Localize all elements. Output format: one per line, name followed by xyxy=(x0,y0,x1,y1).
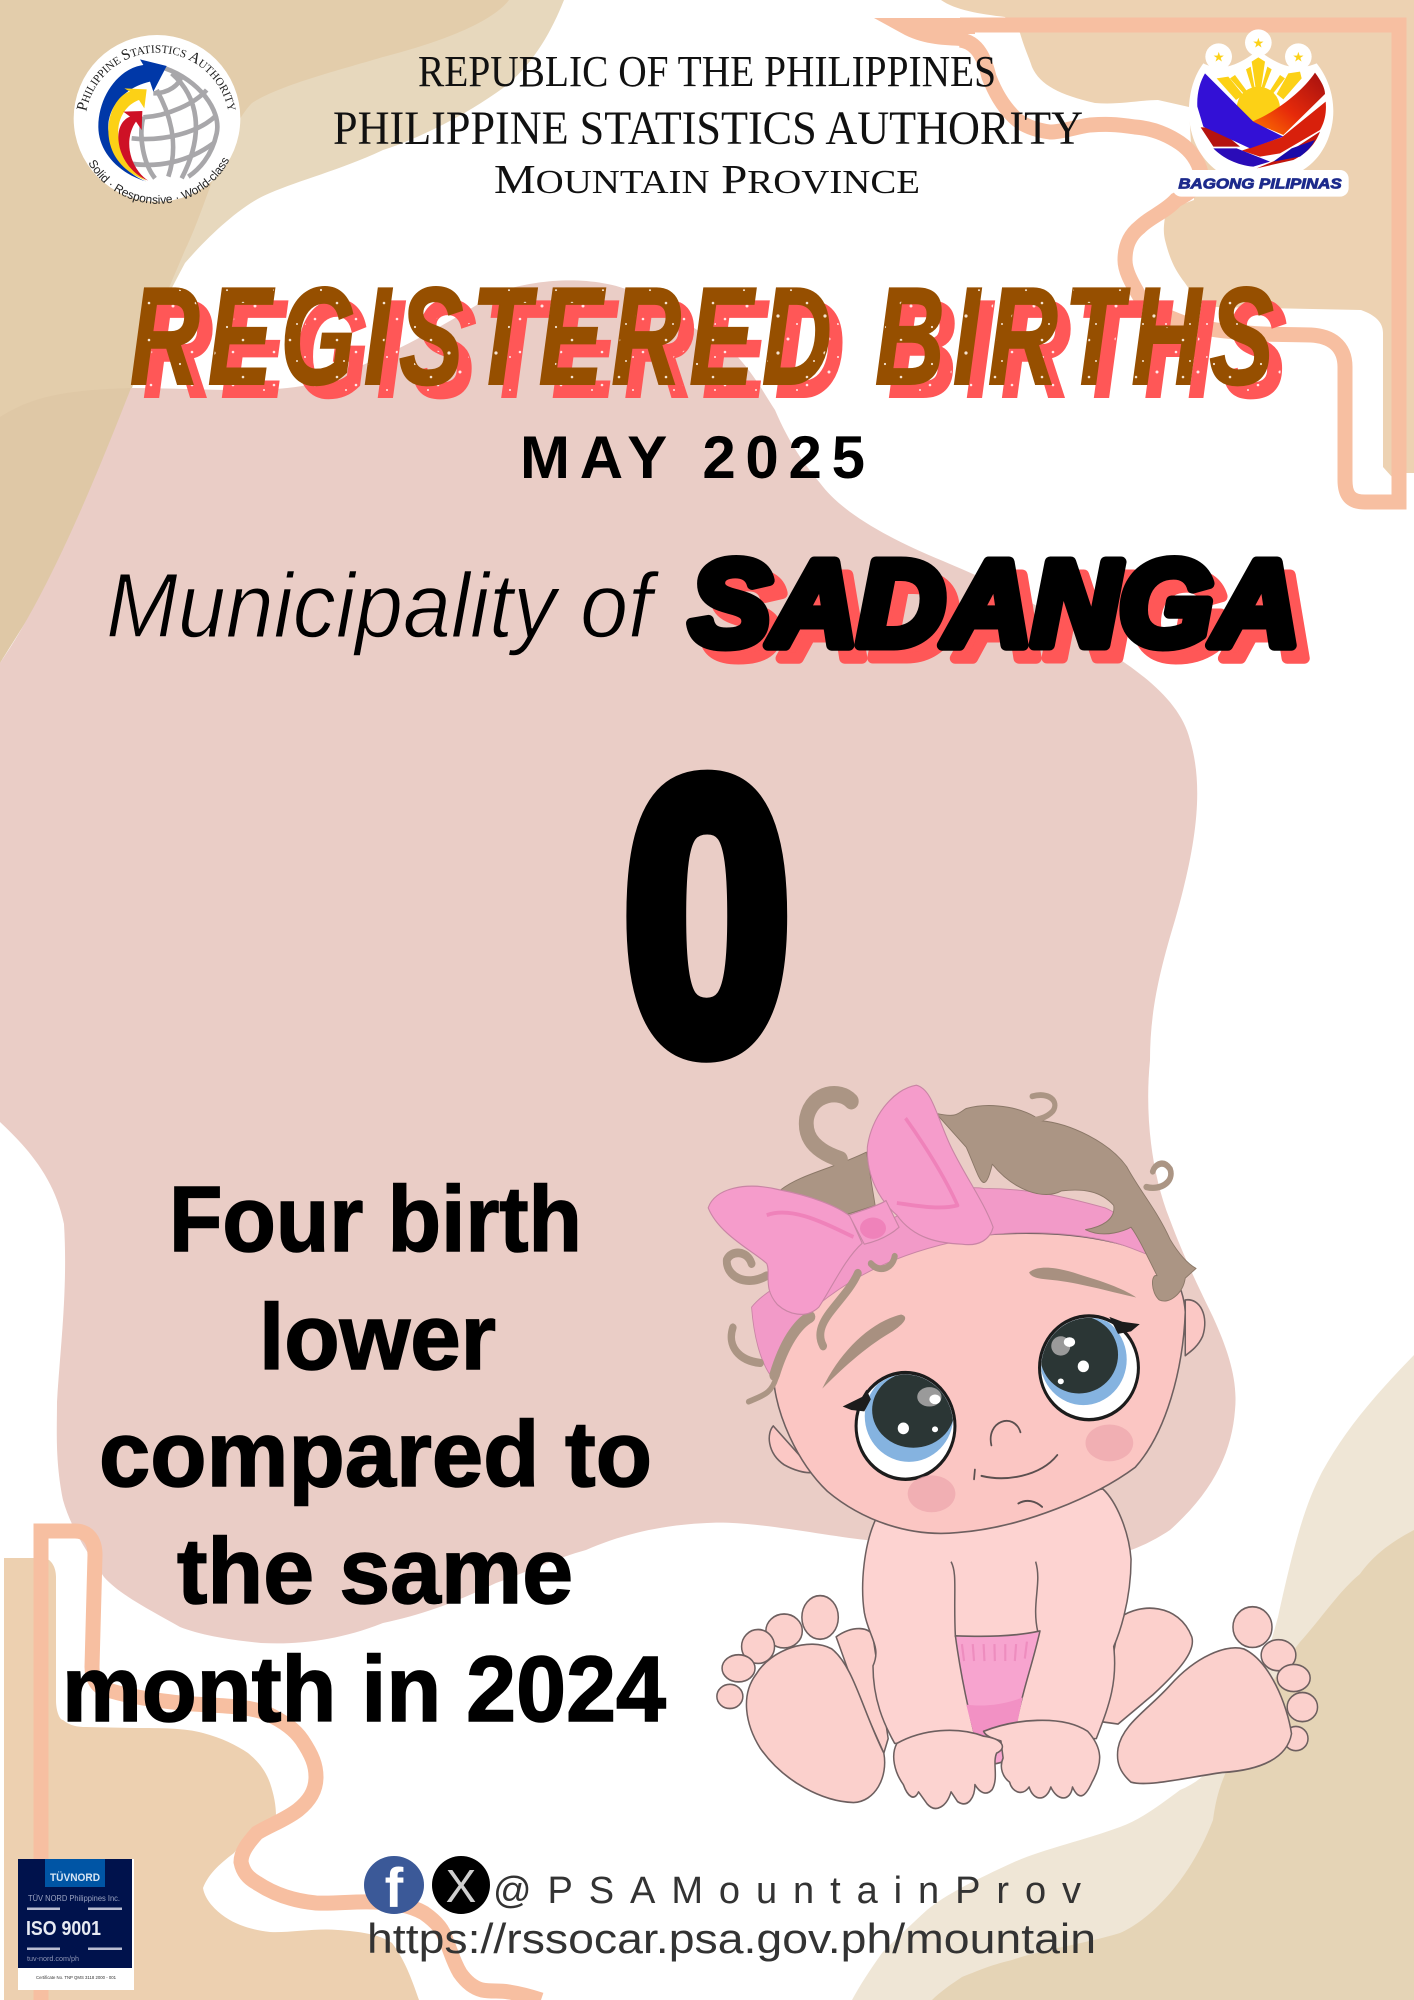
comparison text: the same xyxy=(177,1519,573,1623)
logo: Philippine Statistics Authority seal xyxy=(74,35,240,204)
comparison text: lower xyxy=(259,1285,496,1389)
icon: Facebook: f xyxy=(385,1856,404,1919)
background: top-right tan shape xyxy=(941,0,1414,477)
right eye xyxy=(1040,1314,1140,1420)
certification badge: TUV NORD ISO 9001: Certificate No. TNP QMS 3118 2000 - 001 xyxy=(36,1975,116,1980)
seal ring text xyxy=(85,53,230,125)
logo wordmark: BAGONG PILIPINAS xyxy=(1178,176,1342,192)
soles xyxy=(746,1644,885,1803)
header: agency text: REPUBLIC OF THE PHILIPPINES xyxy=(418,47,996,96)
head xyxy=(773,1233,1185,1533)
thighs xyxy=(836,1629,888,1753)
arrows xyxy=(98,59,167,182)
hair: back locks xyxy=(781,1152,875,1215)
bow xyxy=(708,1085,993,1314)
header: agency text xyxy=(333,47,1083,202)
stars: ★ xyxy=(1213,50,1225,65)
cheeks xyxy=(908,1424,1133,1512)
comparison text: Four birth xyxy=(169,1167,582,1271)
background: central pink blob xyxy=(0,280,1236,1643)
icon: Facebook xyxy=(364,1856,424,1919)
white sticker outline xyxy=(1173,29,1349,197)
background: bottom-right beige waves xyxy=(852,1355,1414,2000)
logo: Philippine Statistics Authority seal: Solid · Responsive · World-class xyxy=(89,158,229,204)
big number: 0: 0 xyxy=(624,703,790,1128)
nose and mouth xyxy=(974,1421,1057,1507)
diaper xyxy=(955,1631,1040,1764)
certification badge: TUV NORD ISO 9001: ISO 9001 xyxy=(26,1918,101,1940)
torso xyxy=(863,1489,1131,1743)
eyebrows xyxy=(822,1314,905,1389)
comparison text xyxy=(62,1167,666,1741)
comparison text: month in 2024 xyxy=(62,1637,666,1741)
background: bottom-left tan shape xyxy=(4,1558,419,2000)
website URL: https://rssocar.psa.gov.ph/mountain xyxy=(367,1915,1096,1962)
left eye xyxy=(843,1371,955,1479)
decorative salmon ribbon: bottom left xyxy=(41,1531,541,2000)
subtitle: month and year: MAY 2025 xyxy=(520,424,865,491)
icon: X xyxy=(432,1856,490,1914)
certification badge: TUV NORD ISO 9001: TÜVNORD xyxy=(50,1871,100,1884)
globe grid xyxy=(128,68,217,178)
stars xyxy=(1213,36,1304,65)
heading: SADANGA: SADANGA xyxy=(703,548,1313,684)
certification badge: TUV NORD ISO 9001: tuv-nord.com/ph xyxy=(27,1954,79,1963)
background: top-left beige wave xyxy=(0,0,564,663)
heading: Municipality of: Municipality of xyxy=(106,555,660,657)
headband xyxy=(752,1188,1148,1375)
header: agency text: MOUNTAIN PROVINCE xyxy=(494,156,920,202)
sun and rays xyxy=(1217,57,1302,130)
certification badge: TUV NORD ISO 9001 xyxy=(18,1859,134,1990)
header: agency text: PHILIPPINE STATISTICS AUTHORITY xyxy=(333,102,1083,155)
icon: X: X xyxy=(446,1860,476,1912)
logo: Philippine Statistics Authority seal: PHILIPPINE STATISTICS AUTHORITY xyxy=(76,45,236,112)
toes xyxy=(717,1596,1318,1751)
social handle: @PSAMountainProv xyxy=(493,1870,1081,1912)
hair: top locks and curls xyxy=(936,1106,1196,1301)
logo: Bagong Pilipinas xyxy=(1173,29,1349,197)
comparison text: compared to xyxy=(99,1402,652,1506)
certification badge: TUV NORD ISO 9001: TÜV NORD Philippines Inc. xyxy=(28,1893,120,1903)
stars: ★ xyxy=(1292,50,1304,65)
heading: SADANGA: SADANGA xyxy=(690,535,1300,671)
ears xyxy=(769,1426,814,1473)
red bands xyxy=(1252,73,1325,135)
illustration: baby girl with pink bow xyxy=(708,1085,1318,1808)
stars: ★ xyxy=(1252,36,1264,51)
hands xyxy=(984,1720,1100,1798)
decorative salmon ribbon: top right xyxy=(874,18,1399,502)
blue bands xyxy=(1197,73,1283,148)
